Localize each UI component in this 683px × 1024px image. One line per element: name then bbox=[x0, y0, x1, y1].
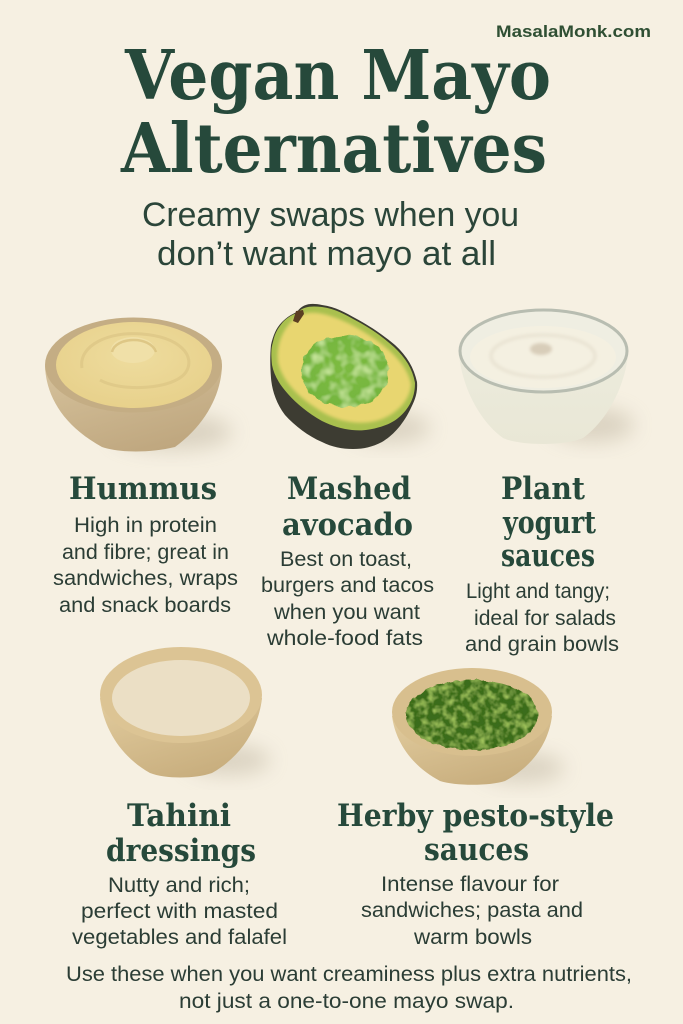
item: hummus: and fibre; great in bbox=[62, 540, 229, 564]
item: mashed avocado: Mashed bbox=[287, 471, 411, 507]
item: plant yogurt sauces: ideal for salads bbox=[474, 606, 616, 630]
footer note: Use these when you want creaminess plus extra nutrients, bbox=[66, 962, 632, 986]
subtitle bbox=[142, 196, 519, 273]
icon: avocado half bbox=[270, 304, 430, 449]
footer note bbox=[66, 962, 632, 1013]
item: mashed avocado bbox=[261, 471, 434, 650]
item: tahini dressings: vegetables and falafel bbox=[72, 925, 287, 949]
item: herby pesto-style sauces: sauces bbox=[424, 832, 529, 868]
watermark: MasalaMonk.com bbox=[496, 22, 651, 41]
icon: pesto bowl bbox=[392, 668, 564, 785]
item: hummus: and snack boards bbox=[59, 593, 231, 617]
title: Alternatives bbox=[120, 109, 547, 189]
footer note: not just a one-to-one mayo swap. bbox=[179, 989, 514, 1013]
item: plant yogurt sauces: Light and tangy; bbox=[466, 579, 610, 603]
item: mashed avocado: burgers and tacos bbox=[261, 573, 434, 597]
item: hummus: Hummus bbox=[69, 471, 217, 507]
item: plant yogurt sauces: sauces bbox=[501, 538, 595, 574]
item: plant yogurt sauces: yogurt bbox=[502, 505, 597, 541]
icon: plant yogurt glass bowl bbox=[459, 310, 634, 444]
item: plant yogurt sauces bbox=[465, 471, 619, 656]
title bbox=[120, 36, 551, 189]
item: herby pesto-style sauces: warm bowls bbox=[413, 925, 532, 949]
icon: hummus bowl bbox=[45, 318, 232, 452]
item: hummus: High in protein bbox=[74, 513, 217, 537]
item: plant yogurt sauces: and grain bowls bbox=[465, 632, 619, 656]
item: tahini dressings: Nutty and rich; bbox=[108, 873, 250, 897]
item: mashed avocado: when you want bbox=[273, 600, 420, 624]
item: hummus bbox=[53, 471, 238, 617]
subtitle: Creamy swaps when you bbox=[142, 196, 519, 234]
item: tahini dressings: dressings bbox=[106, 833, 256, 869]
item: mashed avocado: avocado bbox=[282, 507, 413, 543]
item: hummus: sandwiches, wraps bbox=[53, 566, 238, 590]
item: mashed avocado: Best on toast, bbox=[280, 547, 412, 571]
item: herby pesto-style sauces bbox=[337, 798, 614, 949]
item: tahini dressings: Tahini bbox=[127, 798, 231, 834]
item: herby pesto-style sauces: sandwiches; pasta and bbox=[361, 898, 583, 922]
item: herby pesto-style sauces: Herby pesto-style bbox=[337, 798, 614, 834]
icon: tahini bowl bbox=[100, 647, 270, 778]
title: Vegan Mayo bbox=[124, 36, 551, 116]
subtitle: don’t want mayo at all bbox=[157, 235, 496, 273]
item: herby pesto-style sauces: Intense flavour for bbox=[381, 872, 559, 896]
item: tahini dressings bbox=[72, 798, 287, 949]
item: mashed avocado: whole-food fats bbox=[266, 626, 423, 650]
item: plant yogurt sauces: Plant bbox=[501, 471, 586, 507]
item: tahini dressings: perfect with masted bbox=[81, 899, 278, 923]
